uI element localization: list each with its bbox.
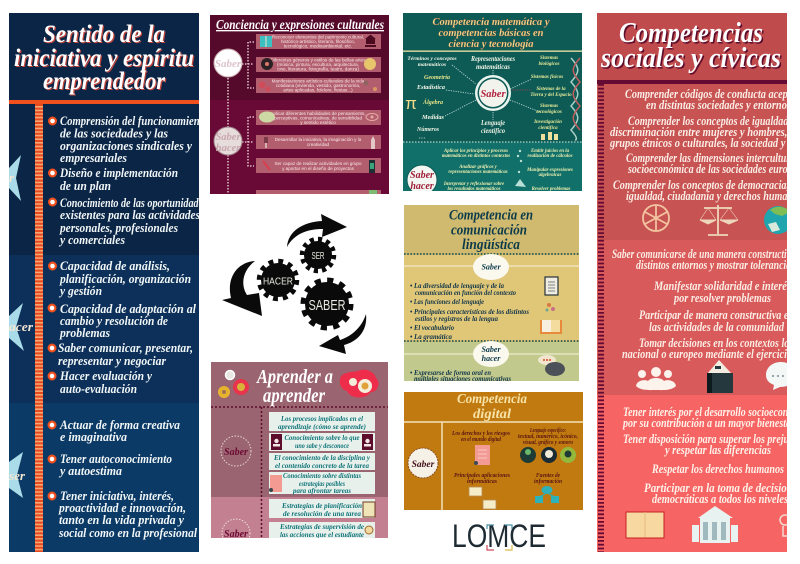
row text: y sentido estético [300, 120, 336, 125]
heading: digital [457, 392, 527, 422]
text: conocimientos, destrezas y actitudes: problemas [59, 325, 110, 340]
icon: dna helix [571, 58, 580, 140]
text: conocimientos, destrezas y actitudes: organizaciones sindicales y [60, 138, 192, 153]
text: saber math left [407, 56, 515, 135]
text: saber math right: tecnológicos [536, 110, 562, 115]
gear: ser [302, 240, 334, 270]
diagram: engranajes ser hacer saber [222, 214, 366, 354]
heading: sentido de la iniciativa: emprendedor [44, 69, 166, 96]
label: saber hacer: Saber [481, 345, 501, 354]
text: conocimientos, destrezas y actitudes: e imaginativa [60, 429, 127, 444]
circle: saber: Saber [480, 89, 506, 100]
heading: sentido de la iniciativa: iniciativa y espíritu [14, 45, 194, 72]
icon: people [636, 367, 676, 390]
heading: matemática: ciencia y tecnología [448, 39, 534, 50]
circle: saber hacer: hacer [410, 181, 434, 192]
heading: sentido de la iniciativa: iniciativa y espíritu [15, 46, 195, 73]
icons: media circles [520, 447, 576, 463]
text: saber [609, 87, 800, 203]
text: lingüística: • Expresarse de forma oral en [410, 369, 491, 377]
heading: sentido de la iniciativa [14, 21, 195, 96]
text: saber math left: Lenguaje [480, 120, 505, 127]
dividers [404, 254, 579, 341]
text: saber math left: Términos y conceptos [407, 56, 457, 62]
icon: pi: π [405, 94, 417, 113]
arrow: left [222, 261, 262, 316]
icons: aprender [269, 434, 375, 534]
text: digital: Lenguaje específico: [529, 428, 566, 434]
heading: sentido de la iniciativa: Sentido de la [43, 21, 165, 48]
circle: saber hacer [214, 127, 242, 155]
text: saber math right: Tierra y del Espacio [530, 93, 572, 98]
text: conocimientos, destrezas y actitudes: tanto en la vida privada y [59, 512, 184, 527]
icon: institution building [692, 506, 738, 543]
text: lingüística: • Las funciones del lenguaje [410, 298, 484, 306]
label: saber hacer: Saber [224, 529, 248, 540]
text: lingüística [410, 282, 529, 383]
text: saber hacer math: Interpretar y reflexionar sobre [443, 182, 505, 187]
text: saber math left: matemáticas [476, 64, 510, 71]
row text: Aplicar diferentes habilidades de pensamiento, [270, 111, 366, 116]
icon: chat bubble [766, 362, 796, 390]
text: saber ser: y respetar las diferencias [663, 443, 771, 457]
labels: saber hacer ser: ser [8, 468, 26, 483]
label: saber [473, 254, 509, 280]
box text: El conocimiento de la disciplina y [273, 453, 371, 462]
icon: confetti [546, 303, 555, 312]
text: conocimientos, destrezas y actitudes: Capacidad de adaptación al [60, 301, 196, 316]
circle: saber hacer [407, 165, 437, 195]
text: saber hacer math: realización de cálculos [527, 154, 573, 159]
text: saber math right: Sistemas [540, 104, 558, 109]
box text: de resolución de una tarea [283, 509, 361, 518]
text: saber math right: Investigación [533, 120, 562, 125]
heading: aprender: Aprender a [255, 366, 333, 388]
row text: y aportar en el diseño de proyectos [282, 166, 355, 171]
panel: aprender a aprender [211, 362, 388, 540]
row text: Desarrollar la iniciativa, la imaginación y la [275, 137, 362, 142]
box text: Conocimiento sobre lo que [284, 433, 360, 442]
heading: competencias: sociales y cívicas [600, 43, 781, 74]
connectors [419, 65, 540, 138]
text: saber ser [622, 405, 800, 506]
text: lingüística: comunicación en función del contexto [415, 289, 516, 297]
text: saber math right: biológicos [539, 62, 559, 67]
heading: digital: digital [473, 407, 511, 422]
text: saber math left: matemáticos [418, 62, 446, 68]
text: saber hacer math: matemáticos en distintos contextos [442, 154, 510, 159]
gear: hacer [260, 262, 296, 298]
icon: speech bubbles [538, 355, 565, 376]
text: conocimientos, destrezas y actitudes: planificación, organización [59, 271, 191, 286]
arrow: bottom [319, 314, 366, 354]
icon: partial figure [780, 515, 790, 536]
circle: saber [408, 448, 438, 478]
heading: competencias: Competencias [620, 20, 765, 50]
icons: symbols [515, 150, 526, 187]
heading: lingüística: Competencia en [449, 208, 533, 224]
text: saber math right: Sistemas [540, 56, 558, 61]
text: digital: Principales aplicaciones [454, 473, 511, 479]
heading: competencias [600, 18, 783, 76]
text: conocimientos, destrezas y actitudes: Diseño e implementación [59, 165, 178, 180]
label: saber hacer [222, 519, 250, 547]
rows: saber [256, 34, 381, 194]
row text: tecnológico, medioambiental, etc. [284, 44, 352, 48]
circle: saber hacer: Saber [215, 132, 241, 143]
text: saber math left: Estadística [416, 84, 446, 91]
icon: flowers [218, 370, 378, 398]
heading: competencias: Competencias [619, 18, 763, 49]
text: digital: Fuentes de [536, 473, 560, 479]
row text: histórico-artístico, literario, filosófico, [281, 39, 355, 44]
text: conocimientos, destrezas y actitudes: auto-evaluación [60, 381, 137, 396]
box text: estrategias posibles [299, 479, 345, 488]
text: conocimientos, destrezas y actitudes: Tener autoconocimiento [60, 451, 172, 466]
icon: globe network [643, 205, 669, 231]
box text: el contenido concreto de la tarea [275, 461, 369, 470]
text: digital: informáticas [467, 479, 498, 485]
circle: saber: Saber [412, 460, 435, 470]
boxes [269, 412, 375, 538]
box text: Los procesos implicados en el [280, 414, 364, 423]
text: conocimientos, destrezas y actitudes: representar y negociar [58, 353, 167, 368]
text: saber hacer math: algebraicas [539, 173, 561, 178]
text: saber hacer: por resolver problemas [673, 291, 771, 305]
text: conocimientos, destrezas y actitudes: Hacer evaluación y [59, 368, 152, 383]
text: saber hacer math: representaciones matemáticas [448, 170, 508, 175]
text: saber hacer math: Manipular expresiones [526, 168, 573, 173]
panel: competencia matemática: Álgebra [422, 98, 444, 106]
label: saber: Saber [481, 262, 501, 272]
text: saber math right [530, 56, 572, 131]
text: conocimientos, destrezas y actitudes: personales, profesionales [59, 220, 178, 235]
text: saber math left: Medidas [421, 114, 444, 121]
icon: clipboard [545, 277, 558, 295]
row text: creatividad [307, 142, 330, 147]
gear: saber: SABER [308, 297, 346, 314]
heading: matemática [432, 17, 550, 50]
bullets [49, 118, 56, 499]
heading: aprender: aprender [263, 385, 325, 407]
row text: cotidiana (vivienda, vestido, gastronomía, [276, 83, 360, 88]
icon: document [474, 445, 490, 465]
text: conocimientos, destrezas y actitudes: Capacidad de análisis, [60, 258, 170, 273]
text: conocimientos, destrezas y actitudes: empresariales [60, 150, 127, 165]
text: saber hacer math: Analizar gráficos y [458, 165, 498, 170]
row text: Manifestaciones artístico-culturales de la vida [272, 78, 365, 84]
gear: saber [304, 280, 350, 328]
box text [273, 414, 371, 539]
box text: Estrategias de planificación [281, 501, 362, 510]
text: conocimientos, destrezas y actitudes: Actuar de forma creativa [59, 417, 180, 432]
text: lingüística: estilos y registros de la lengua [415, 315, 498, 323]
text: saber hacer [612, 247, 800, 361]
row text: perceptivas, comunicativas, de sensibilidad [274, 116, 362, 120]
heading: digital: Competencia [457, 392, 527, 407]
box text: las acciones que el estudiante [280, 530, 365, 539]
label: saber: Saber [224, 447, 248, 458]
circle: saber hacer: hacer [216, 143, 241, 154]
heading: aprender [255, 366, 333, 407]
box text: aprendizaje (cómo se aprende) [278, 422, 366, 431]
icon: ballot box [707, 360, 733, 393]
gear: ser: SER [312, 251, 324, 262]
panel: comunicación lingüística [404, 205, 579, 383]
text: saber math left: Números [416, 127, 440, 133]
text: conocimientos, destrezas y actitudes: proactividad e innovación, [58, 500, 186, 515]
text: lingüística: • Principales características de los distintos [410, 308, 529, 316]
panel: competencia matemática [403, 13, 582, 192]
logo: lomce: LOMCE [452, 518, 546, 554]
text: conocimientos, destrezas y actitudes: Tener iniciativa, interés, [60, 488, 174, 503]
box text: Estrategias de supervisión de [279, 522, 365, 531]
text: saber hacer math [442, 149, 573, 192]
panel: conciencia y expresiones culturales [210, 15, 389, 194]
box text: para afrontar tareas [292, 486, 351, 495]
heading: sentido de la iniciativa: emprendedor [43, 68, 165, 95]
labels: saber hacer ser [8, 170, 34, 483]
icon: flasks [541, 132, 558, 140]
text: conocimientos, destrezas y actitudes: y comerciales [58, 232, 125, 247]
icon: network [535, 486, 559, 503]
circle: saber: Saber [215, 58, 242, 70]
row text [270, 34, 366, 171]
text: saber math right: Sistemas de la [536, 87, 566, 92]
text: lingüística: múltiples situaciones comunicativas [414, 375, 511, 383]
arrow: top [287, 214, 347, 247]
row text: Reconocer elementos del patrimonio cultural, [272, 34, 364, 40]
text: conocimientos, destrezas y actitudes: de un plan [60, 178, 111, 193]
text: conocimientos, destrezas y actitudes: Saber comunicar, presentar, [58, 340, 193, 355]
text: saber hacer math: Aplicar los principios y procesos [443, 149, 508, 154]
label: saber hacer [473, 341, 509, 367]
text: digital: visual, gráfico y sonoro [523, 440, 573, 446]
heading: sentido de la iniciativa: Sentido de la [44, 22, 166, 49]
panel: sentido de la iniciativa y espíritu emprendedor [8, 13, 208, 552]
heading: competencias: sociales y cívicas [602, 44, 783, 76]
text: saber hacer math: Emitir juicios en la [530, 149, 570, 154]
text: lingüística: • La gramática [410, 333, 452, 341]
text: lingüística: • La diversidad de lenguaje y de la [410, 282, 504, 290]
text: saber math left: Representaciones [470, 56, 515, 63]
circle: saber [214, 49, 242, 77]
icon: earth [764, 206, 792, 234]
icon: book [540, 320, 562, 334]
heading: lingüística: comunicación [451, 222, 527, 238]
text: digital: textual, numérico, icónico, [518, 434, 578, 440]
text: digital: en el mundo digital [461, 437, 501, 443]
row text: Ser capaz de realizar actividades en grupo [274, 161, 362, 166]
text: conocimientos, destrezas y actitudes: y gestión [58, 283, 102, 298]
box text: Conocimiento sobre distintas [283, 471, 361, 480]
heading: matemática: Competencia matemática y [432, 17, 550, 28]
icon: scales [700, 205, 738, 235]
heading: matemática: competencias básicas en [438, 28, 544, 39]
labels: saber hacer ser: acer [9, 319, 34, 334]
label: saber [221, 436, 251, 466]
icon: stars [9, 155, 24, 498]
text: conocimientos, destrezas y actitudes: cambio y resolución de [60, 313, 168, 328]
label: saber hacer: hacer [482, 354, 501, 363]
row text: artes aplicadas, folclore, fiestas...) [283, 88, 353, 92]
text: digital [451, 428, 578, 485]
connectors [228, 42, 254, 194]
text: saber math right: científica [538, 126, 558, 131]
heading: lingüística: lingüística [462, 237, 520, 253]
gear: hacer: HACER [263, 276, 293, 288]
panel: competencia digital [404, 392, 583, 510]
row text: (música, pintura, escultura, arquitectura, [277, 62, 359, 67]
row text: Diferentes géneros y estilos de las bellas artes [270, 58, 366, 62]
text: conocimientos, destrezas y actitudes: de las sociedades y las [60, 126, 168, 140]
icon: open book [626, 512, 664, 538]
labels: saber hacer ser: r [9, 170, 15, 185]
icons: cultural [258, 34, 378, 194]
text: conocimientos, destrezas y actitudes [58, 113, 208, 540]
text: digital: Los derechos y los riesgos [451, 431, 511, 437]
text: saber hacer math: los resultados matemáticos [447, 187, 501, 192]
text: saber math left: científico [481, 128, 506, 135]
text: saber hacer math: Resolver problemas [532, 187, 571, 192]
icon: monitors [469, 487, 496, 509]
dividers [211, 407, 388, 538]
circle: saber hacer: Saber [410, 170, 434, 181]
text: lingüística: • El vocabulario [410, 324, 454, 332]
row text: cine, literatura, fotografía, teatro, danza) [277, 66, 359, 72]
text: conocimientos, destrezas y actitudes: y autoestima [58, 463, 122, 478]
divider [403, 141, 582, 143]
panel: competencia matemática: Geometría [424, 74, 451, 81]
panel: competencias sociales y cívicas [597, 13, 800, 552]
circle: saber [475, 75, 511, 111]
text: saber math right: Sistemas físicos [531, 75, 563, 80]
box text: uno sabe y desconoce [295, 441, 350, 450]
text: digital: información [534, 479, 563, 485]
heading: lingüística [449, 208, 533, 253]
